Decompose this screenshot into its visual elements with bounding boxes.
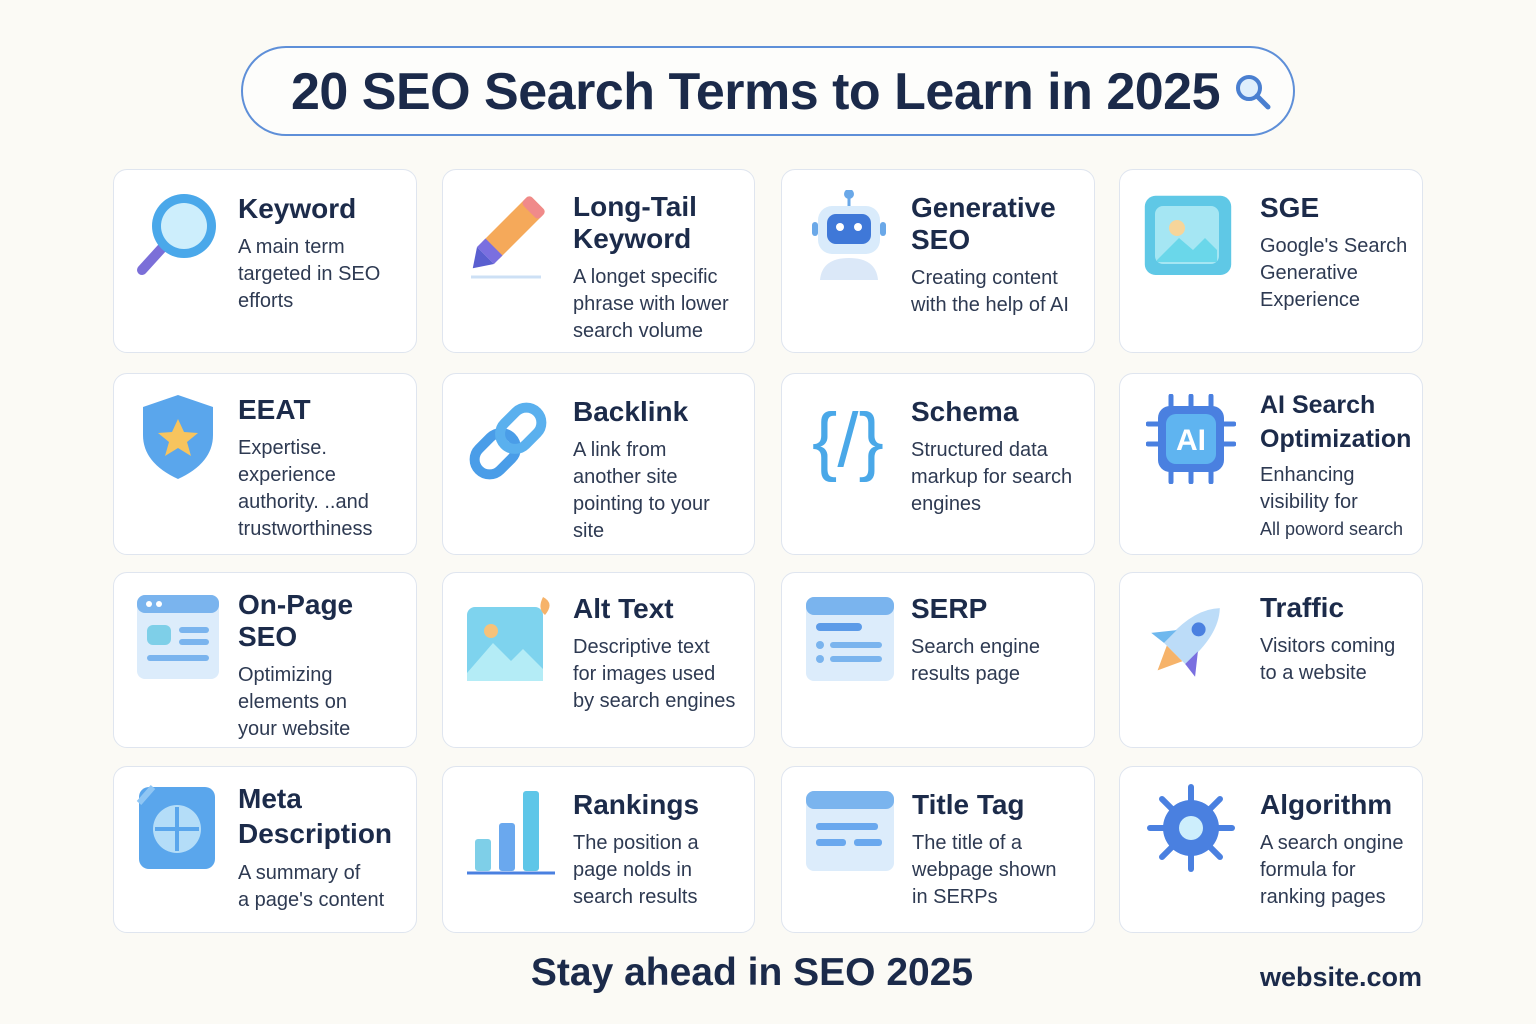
text: The title of a [912,832,1022,854]
text [573,789,699,908]
text: Backlink [573,396,688,427]
text: webpage shown [912,859,1057,881]
text: Rankings [573,789,699,820]
text: Optimization [1260,425,1411,453]
card: Rankings [442,766,755,933]
text: your website [238,718,350,740]
text: SGE [1260,192,1319,223]
text: A main term [238,236,345,258]
text: page nolds in [573,859,692,881]
text: Structured data [911,439,1048,461]
icon: magnifier [1236,75,1270,110]
text: SERP [911,593,987,624]
text: Optimizing [238,664,332,686]
icon: chain link [470,402,546,480]
card: SERP [781,572,1095,748]
icon: code braces: {/} [812,398,884,483]
card: Generative SEO [781,169,1095,353]
text: efforts [238,290,293,312]
title [241,46,1295,136]
text: results page [911,663,1020,685]
text: AI Search [1260,391,1375,419]
text: SEO [911,224,970,255]
icon: robot [812,190,886,280]
text: to a website [1260,662,1367,684]
footer website: website.com [1260,962,1422,992]
text: Schema [911,396,1018,427]
text: Visitors coming [1260,635,1395,657]
icon: AI chip: AI [1176,424,1206,457]
text: The position a [573,832,699,854]
footer tagline: Stay ahead in SEO 2025 [531,951,973,994]
text [238,394,372,540]
card: Title Tag [781,766,1095,933]
card: SGE [1119,169,1423,353]
text [1260,789,1403,908]
text: with the help of AI [911,294,1069,316]
text: pointing to your [573,493,710,515]
text: by search engines [573,690,735,712]
card: Schema [781,373,1095,555]
text: A longet specific [573,266,718,288]
text: phrase with lower [573,293,729,315]
text: Algorithm [1260,789,1392,820]
text: Search engine [911,636,1040,658]
icon: image card [1144,196,1232,275]
text: Expertise. [238,437,327,459]
text: authority. ..and [238,491,369,513]
text: Generative [911,192,1056,223]
text [238,193,380,312]
card: Backlink [442,373,755,555]
icon: bar chart [467,791,555,874]
text: formula for [1260,859,1356,881]
text: A search ongine [1260,832,1403,854]
text: visibility for [1260,491,1358,513]
card: Traffic [1119,572,1423,748]
text: On-Page [238,589,353,620]
text: Traffic [1260,592,1344,623]
text: Keyword [238,193,356,224]
text: EEAT [238,394,311,425]
icon: rocket [1151,608,1220,677]
text: Alt Text [573,593,674,624]
text: A summary of [238,862,360,884]
text: targeted in SEO [238,263,380,285]
card: EEAT [113,373,417,555]
card: AI Search [1119,373,1423,555]
text: a page's content [238,889,384,911]
text: Title Tag [912,789,1025,820]
text: ranking pages [1260,886,1386,908]
card: On-Page SEO [113,572,417,748]
text: elements on [238,691,347,713]
text: markup for search [911,466,1072,488]
text: search results [573,886,698,908]
icon: shield star [143,395,213,479]
text: Enhancing [1260,464,1355,486]
text [573,593,735,712]
text: Creating content [911,267,1058,289]
text: A link from [573,439,666,461]
icon: AI chip [1146,394,1236,484]
card: Long-Tail [442,169,755,353]
icon: picture [467,597,550,681]
text: site [573,520,604,542]
text: Google's Search [1260,235,1407,257]
text: for images used [573,663,715,685]
text [911,593,1040,685]
text: search volume [573,320,703,342]
text: Meta [238,783,302,814]
text [1260,592,1395,684]
text [238,783,392,911]
card: Keyword [113,169,417,353]
text: trustworthiness [238,518,372,540]
icon: results page [806,597,894,681]
icon: document globe [136,785,215,869]
icon: magnifier [137,194,216,275]
icon: pencil [471,196,545,278]
text [1260,391,1411,539]
text [573,191,729,342]
text: Generative [1260,262,1358,284]
text [911,192,1069,316]
text: experience [238,464,336,486]
text: another site [573,466,678,488]
text [573,396,710,542]
text [912,789,1057,908]
text [911,396,1072,515]
text: Long-Tail [573,191,697,222]
text: SEO [238,621,297,652]
text: All poword search [1260,519,1403,539]
text: Descriptive text [573,636,710,658]
text: Keyword [573,223,691,254]
text: Description [238,818,392,849]
text: Experience [1260,289,1360,311]
icon: webpage [137,595,219,679]
icon: title page [806,791,894,871]
icon: gear [1147,784,1235,872]
text: in SERPs [912,886,998,908]
text [238,589,353,740]
text: engines [911,493,981,515]
card: Alt Text [442,572,755,748]
title: 20 SEO Search Terms to Learn in 2025 [291,63,1220,121]
text [1260,192,1407,311]
card: Meta Description [113,766,417,933]
card: Algorithm [1119,766,1423,933]
